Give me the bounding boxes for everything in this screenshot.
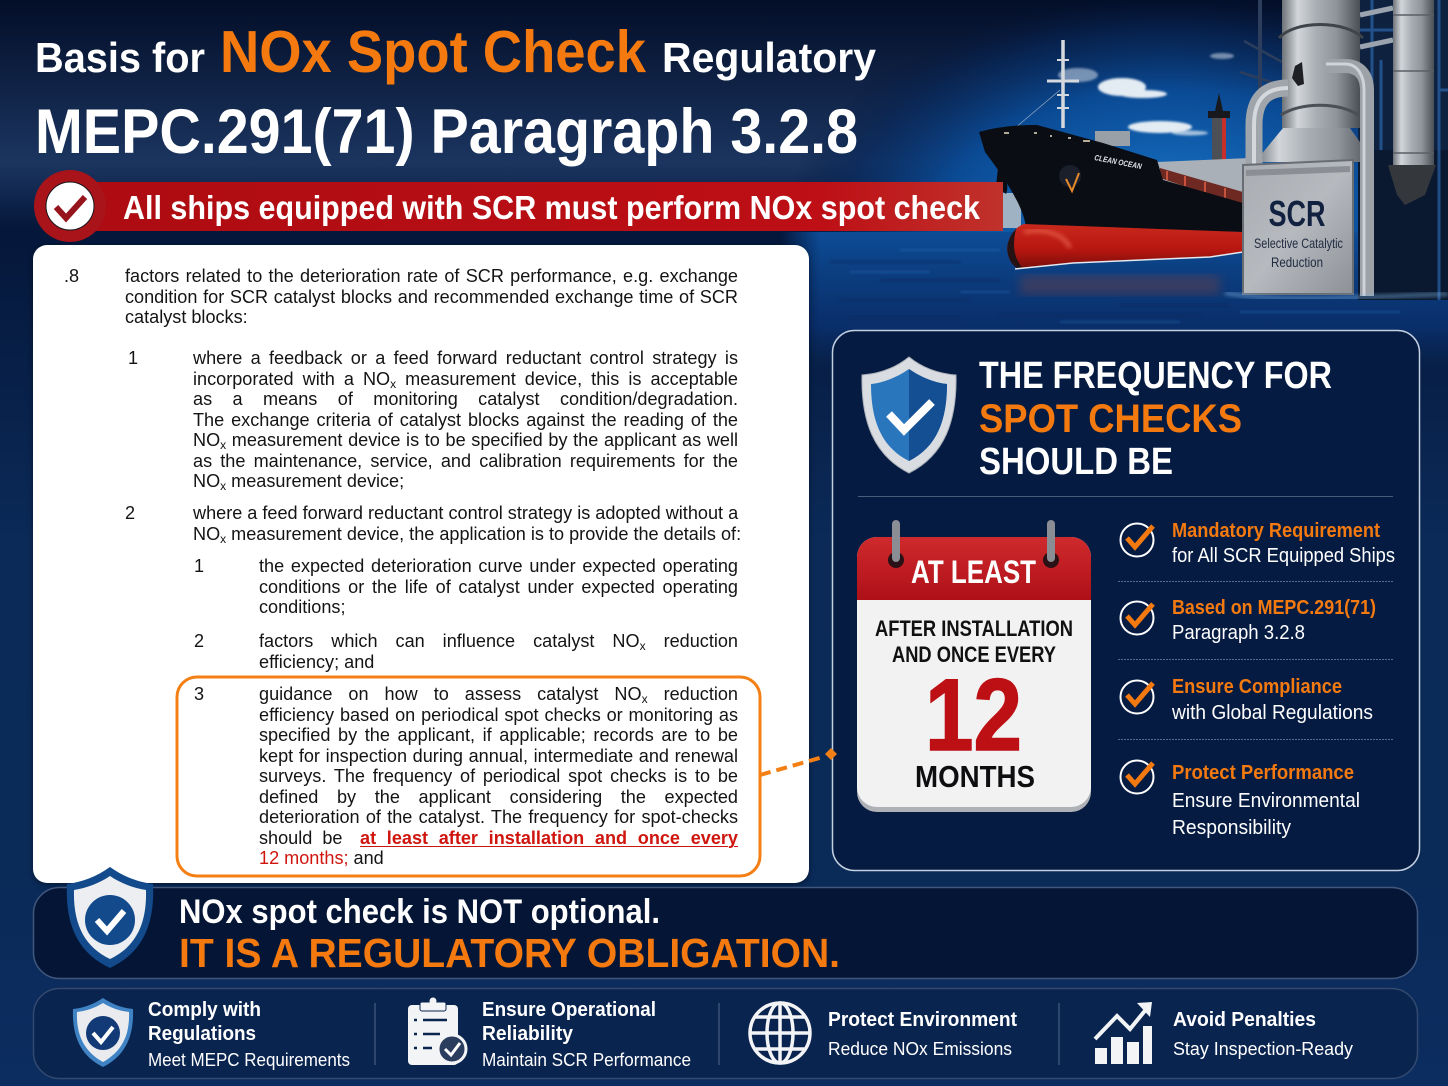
icon: red check badge — [34, 170, 106, 242]
frequency heading: SHOULD BE — [979, 441, 1173, 483]
ship superstructure — [1157, 158, 1250, 210]
icon: blue shield — [862, 357, 956, 473]
bullet 1: Mandatory Requirement — [1172, 520, 1380, 542]
title line 1 — [35, 19, 877, 85]
benefit: environment — [750, 1003, 1017, 1063]
benefit: comply: Meet MEPC Requirements — [148, 1050, 350, 1070]
sub-item number 3: 3 — [194, 684, 204, 704]
dashed arrow — [760, 748, 837, 775]
sub-item 3 text: specified by the applicant, if applicable; records are to be — [259, 725, 738, 745]
calendar: 12 months: MONTHS — [915, 759, 1035, 794]
calendar: 12 months: AT LEAST — [911, 554, 1036, 590]
sub-item 3 text: defined by the applicant considering the expected — [259, 787, 738, 807]
benefit: comply — [73, 998, 350, 1070]
clause text: condition for SCR catalyst blocks and recommended exchange time of SCR — [125, 287, 738, 307]
sub-item 1 text: conditions; — [259, 597, 346, 617]
sub-item 3 text: deterioration of the catalyst. The frequency for spot-checks — [259, 807, 738, 827]
benefit: environment: Reduce NOx Emissions — [828, 1039, 1012, 1059]
right pipe — [1326, 64, 1367, 296]
item 1 text: as a means of monitoring catalyst condition/degradation. — [193, 389, 738, 409]
item 1 text: where a feedback or a feed forward reductant control strategy is — [193, 348, 738, 368]
sub-item number 2: 2 — [194, 631, 204, 651]
item 1 text: The exchange criteria of catalyst blocks against the reading of the — [193, 410, 738, 430]
light patch behind bow — [1003, 193, 1021, 228]
sub-item 1 text: conditions or the life of catalyst under expected operating — [259, 577, 738, 597]
SCR box — [1243, 160, 1353, 294]
item 1 text: incorporated with a NOx measurement device, this is acceptable — [193, 369, 738, 391]
title line 1: NOx Spot Check — [220, 19, 646, 85]
sub-item 3 text: 12 months; and — [259, 848, 384, 868]
item 1 text — [193, 348, 738, 493]
bullet 2: Paragraph 3.2.8 — [1172, 622, 1305, 644]
item 2 text: NOx measurement device, the application is to provide the details of: — [193, 524, 741, 546]
sub-item 3 text: guidance on how to assess catalyst NOx reduction — [259, 684, 738, 706]
calendar: 12 months: AND ONCE EVERY — [892, 642, 1056, 667]
benefit: comply: Comply with — [148, 999, 261, 1021]
bullet 1 — [1120, 520, 1395, 567]
sub-item 1 text — [259, 556, 738, 617]
bullet 4: Protect Performance — [1172, 762, 1354, 784]
second stack — [1388, 0, 1436, 205]
bullet 4: Responsibility — [1172, 817, 1291, 839]
icon: callout shield — [67, 867, 153, 968]
sub-item 2 text: efficiency; and — [259, 652, 374, 672]
frequency heading — [979, 355, 1332, 483]
pipes — [1254, 88, 1288, 165]
calendar: 12 months: AFTER INSTALLATION — [875, 616, 1073, 641]
bullet 4: Ensure Environmental — [1172, 790, 1360, 812]
sub-item 3 text — [259, 684, 738, 868]
reflection — [1020, 275, 1220, 295]
item number 2: 2 — [125, 503, 135, 523]
sub-item 1 text: the expected deterioration curve under expected operating — [259, 556, 738, 576]
callout bar: IT IS A REGULATORY OBLIGATION. — [179, 930, 840, 976]
panel: frequency — [832, 330, 1420, 870]
bullet 3: Ensure Compliance — [1172, 676, 1342, 698]
bullet 3 — [1120, 676, 1373, 724]
benefit: penalties — [1095, 1002, 1353, 1064]
benefit: penalties: Avoid Penalties — [1173, 1009, 1316, 1031]
sub-item 3 text: at least after installation and once every — [360, 828, 738, 848]
frequency heading: SPOT CHECKS — [979, 397, 1242, 441]
sub-item 3 text: kept for inspection during annual, intermediate and renewal — [259, 746, 738, 766]
photo: ship and SCR tower — [750, 0, 1448, 372]
portholes — [1004, 133, 1090, 141]
back structure — [1240, 0, 1448, 300]
sub-item number 1: 1 — [194, 556, 204, 576]
bullet 3: with Global Regulations — [1171, 702, 1373, 724]
bullet 4 — [1120, 760, 1360, 839]
clause text: catalyst blocks: — [125, 307, 248, 327]
bullet 2: Based on MEPC.291(71) — [1172, 597, 1376, 619]
ship name: CLEAN OCEAN — [1094, 153, 1143, 171]
calendar: 12 months: 12 — [925, 658, 1022, 772]
item 1 text: NOx measurement device; — [193, 471, 404, 493]
title line 2: MEPC.291(71) Paragraph 3.2.8 — [35, 97, 858, 167]
sub-item 2 text: factors which can influence catalyst NOx reduction — [259, 631, 738, 653]
benefit: environment: Protect Environment — [828, 1009, 1017, 1031]
highlight box — [177, 677, 760, 876]
sub-item 3 text: should be — [259, 828, 342, 848]
SCR box: Reduction — [1271, 254, 1323, 270]
mast — [1015, 40, 1079, 128]
callout bar — [34, 867, 1418, 978]
benefit: reliability: Maintain SCR Performance — [482, 1050, 691, 1070]
clause text: factors related to the deterioration rate of SCR performance, e.g. exchange — [125, 266, 738, 286]
item number 1: 1 — [128, 348, 138, 368]
item 2 text: where a feed forward reductant control strategy is adopted without a — [193, 503, 738, 523]
panel: regulation document — [33, 245, 809, 883]
red banner: All ships equipped with SCR must perform NOx spot check — [123, 189, 981, 226]
clause text — [125, 266, 738, 327]
frequency heading: THE FREQUENCY FOR — [979, 355, 1332, 397]
SCR box: SCR — [1268, 193, 1326, 234]
title line 1: Regulatory — [662, 34, 877, 81]
benefit: reliability: Ensure Operational — [482, 999, 656, 1021]
benefit: reliability — [408, 998, 691, 1070]
bullet 2 — [1120, 597, 1376, 644]
SCR main tower — [1255, 0, 1374, 162]
benefit: comply: Regulations — [148, 1023, 256, 1045]
red hull — [1007, 224, 1243, 268]
calendar: 12 months — [857, 520, 1091, 812]
ship hull — [979, 125, 1243, 232]
ship emblem — [1059, 165, 1081, 191]
sub-item 3 text: efficiency based on periodical spot checks or monitoring as — [259, 705, 738, 725]
bullet 1: for All SCR Equipped Ships — [1172, 545, 1395, 567]
item 2 text — [193, 503, 741, 546]
title line 1: Basis for — [35, 34, 205, 81]
callout bar: NOx spot check is NOT optional. — [179, 893, 660, 931]
benefit: penalties: Stay Inspection-Ready — [1173, 1039, 1353, 1059]
SCR box: Selective Catalytic — [1254, 235, 1343, 251]
clause number .8: .8 — [64, 266, 79, 286]
benefits bar — [34, 988, 1418, 1078]
lighthouse funnel — [1208, 93, 1230, 165]
sub-item 3 text: surveys. The frequency of periodical spot checks is to be — [259, 766, 738, 786]
sub-item 2 text — [259, 631, 738, 672]
benefit: reliability: Reliability — [482, 1023, 574, 1045]
item 1 text: NOx measurement device is to be specified by the applicant as well — [193, 430, 738, 452]
item 1 text: as the maintenance, service, and calibration requirements for the — [193, 451, 738, 471]
